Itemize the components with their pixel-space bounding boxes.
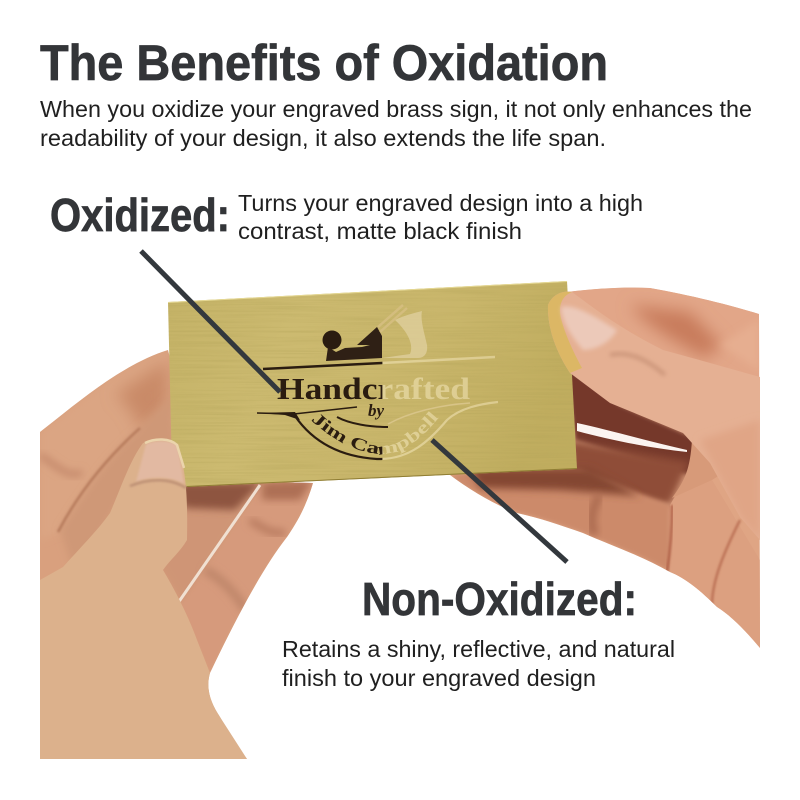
logo: lower swoosh xyxy=(257,402,498,459)
description: non-oxidized xyxy=(282,636,675,691)
intro text: readability of your design, it also extends the life span. xyxy=(40,125,606,151)
callout line: non-oxidized xyxy=(432,440,567,562)
photo: left hand holding sign xyxy=(40,340,330,760)
photo: right hand behind sign xyxy=(450,280,760,650)
logo: rule above name xyxy=(263,357,495,369)
intro text xyxy=(40,96,752,151)
heading: Non-Oxidized: Non-Oxidized: xyxy=(362,573,637,625)
photo: brass sign xyxy=(160,275,585,495)
description: oxidized: contrast, matte black finish xyxy=(238,218,522,244)
logo: by: by xyxy=(368,401,384,420)
description: non-oxidized: finish to your engraved design xyxy=(282,665,596,691)
callout line: oxidized xyxy=(141,251,280,392)
logo: Handcrafted: Handcrafted xyxy=(277,371,470,406)
description: oxidized: Turns your engraved design into a high xyxy=(238,190,643,216)
photo: left thumb over sign and palm xyxy=(40,439,247,759)
engraved logo: half oxidized, half natural xyxy=(257,304,498,460)
heading: Oxidized: Oxidized: xyxy=(50,189,230,241)
logo: plane knob, body and blade xyxy=(322,305,427,361)
photo: right thumb over sign xyxy=(540,285,765,545)
description: oxidized xyxy=(238,190,643,244)
description: non-oxidized: Retains a shiny, reflective, and natural xyxy=(282,636,675,662)
logo: Jim Campbell: Jim Campbell xyxy=(312,411,438,455)
intro text: When you oxidize your engraved brass sign, it not only enhances the xyxy=(40,96,752,122)
title: The Benefits of Oxidation xyxy=(40,35,608,91)
